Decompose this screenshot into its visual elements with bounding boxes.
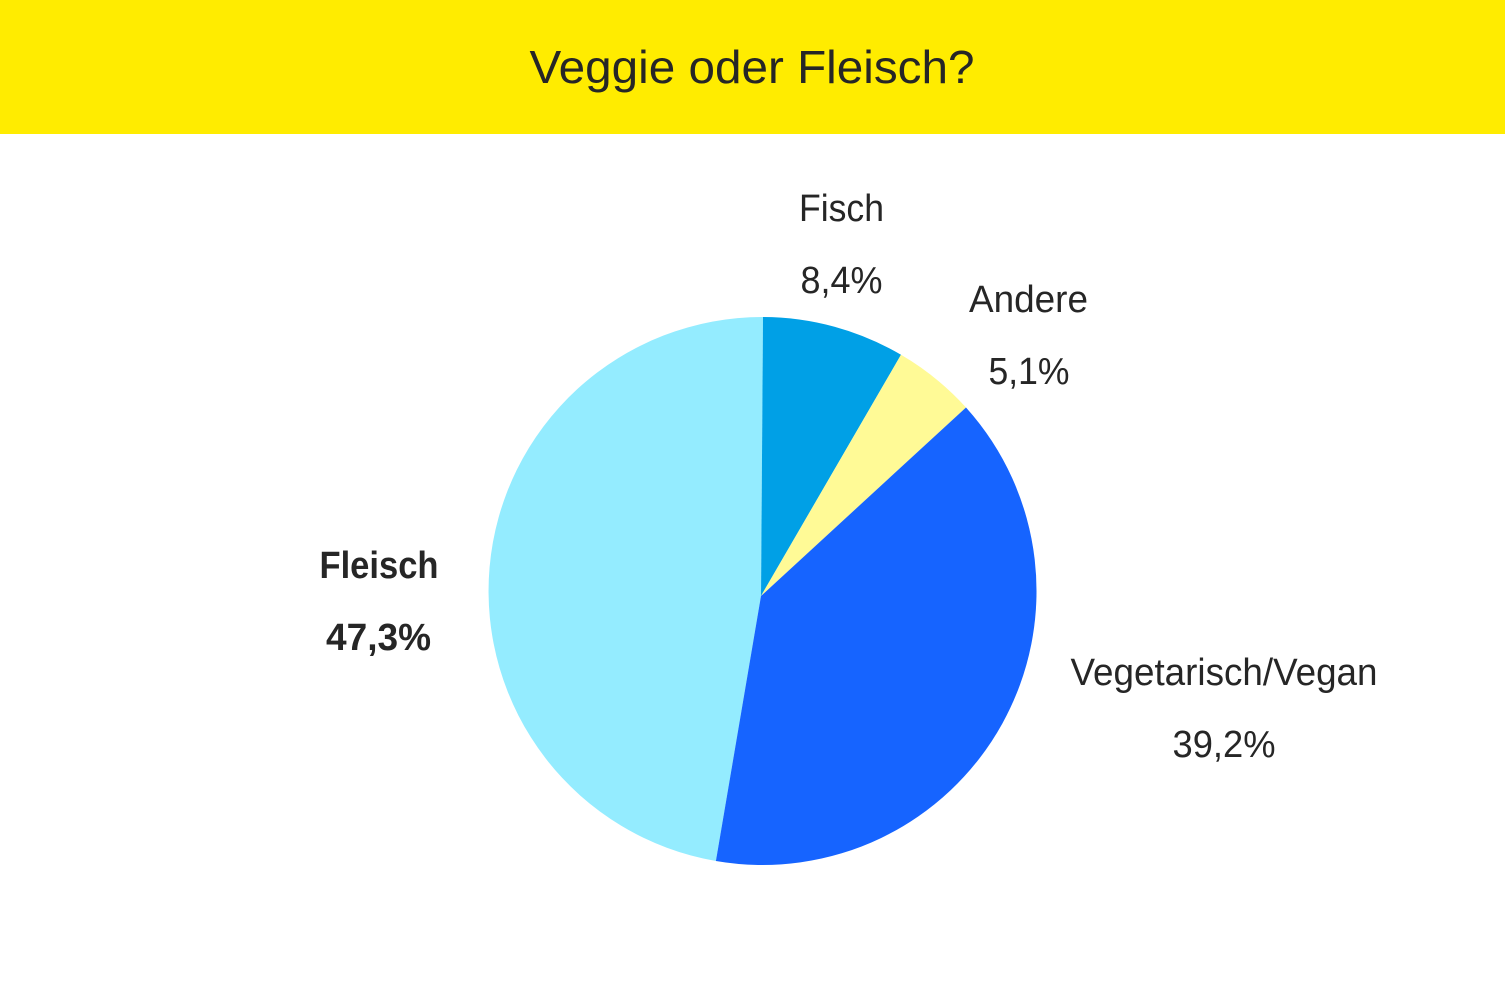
header band <box>0 0 1505 134</box>
label: Vegetarisch/Vegan: 39,2% <box>1172 724 1276 766</box>
slice: Andere 5,1% <box>761 355 966 596</box>
label: Fisch: Fisch <box>799 188 884 230</box>
label: Fleisch: Fleisch <box>320 545 438 587</box>
label: Fleisch <box>320 545 438 659</box>
slice: Fisch 8,4% <box>761 317 901 596</box>
label: Vegetarisch/Vegan <box>1070 652 1378 766</box>
label: Fisch <box>799 188 884 302</box>
label: Vegetarisch/Vegan: Vegetarisch/Vegan <box>1070 652 1378 694</box>
slice: Vegetarisch/Vegan 39,2% <box>716 408 1037 865</box>
label: Andere: 5,1% <box>988 351 1070 393</box>
label: Fisch: 8,4% <box>800 260 882 302</box>
label: Andere: Andere <box>969 279 1088 321</box>
label: Fleisch: 47,3% <box>326 617 431 659</box>
label: Andere <box>969 279 1088 393</box>
slice: Fleisch 47,3% <box>489 317 763 861</box>
title: Veggie oder Fleisch? <box>530 41 974 93</box>
pie chart <box>489 317 1037 865</box>
